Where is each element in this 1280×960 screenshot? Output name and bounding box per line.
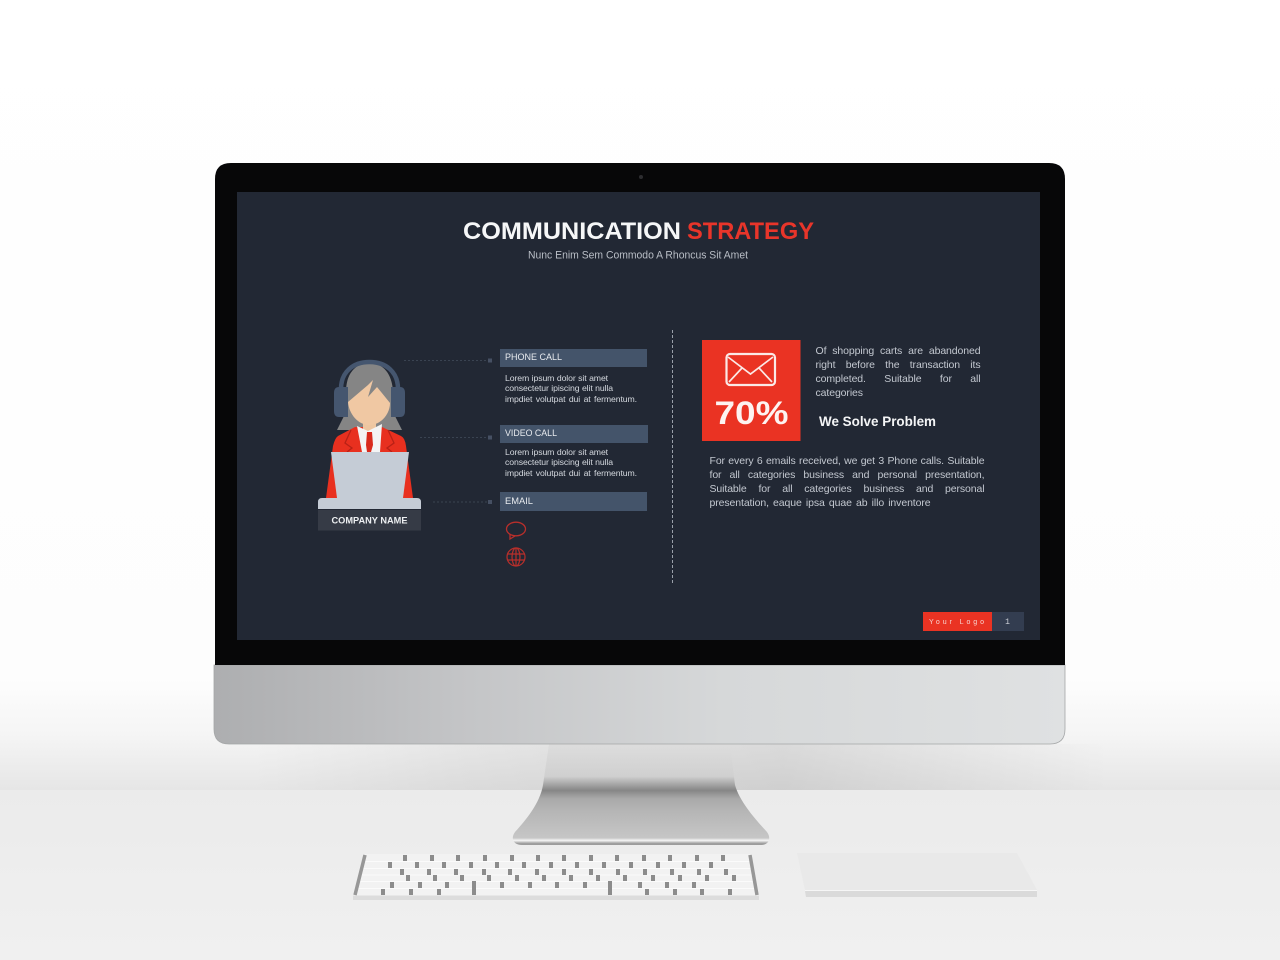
heading bar: email [500, 492, 647, 511]
text: emails and phone calls paragraph [710, 454, 984, 508]
ear cups [334, 387, 348, 417]
text: video call description: impdiet volutpat dui at fermentum. [505, 468, 637, 478]
stat card: 70 percent emails [702, 340, 800, 441]
footer: page number: 1 [1005, 618, 1010, 627]
subtitle: Nunc Enim Sem Commodo A Rhoncus Sit Amet [528, 250, 748, 262]
text: emails and phone calls paragraph: Suitable for all categories business and personal [710, 482, 984, 494]
text: phone call description: consectetur ipiscing elit nulla [505, 383, 613, 393]
keyboard [353, 854, 759, 900]
text: video call description [505, 446, 637, 478]
monitor chin [214, 665, 1065, 744]
divider [672, 330, 674, 584]
company label [318, 510, 421, 530]
illustration: call agent at laptop [318, 362, 421, 530]
monitor bezel [215, 163, 1065, 665]
title [463, 218, 814, 245]
text: video call description: consectetur ipiscing elit nulla [505, 457, 613, 467]
footer: logo tab [923, 612, 992, 631]
text: phone call description: impdiet volutpat dui at fermentum. [505, 394, 637, 404]
text: phone call description: Lorem ipsum dolor sit amet [505, 372, 608, 382]
panel: presentation slide on screen [237, 192, 1040, 640]
shirt and tie [357, 424, 382, 452]
lapels [345, 430, 394, 452]
monitor stand [513, 744, 769, 845]
text: phone call description [505, 372, 637, 404]
trackpad [797, 853, 1037, 897]
heading: we solve problem: We Solve Problem [819, 413, 936, 429]
text: shopping carts statistic: completed. Suitable for all [816, 372, 980, 384]
icon: globe [507, 548, 525, 566]
footer: logo tab: Your Logo [929, 619, 984, 626]
title: STRATEGY [687, 218, 814, 245]
title: COMMUNICATION [463, 218, 681, 245]
text: video call description: Lorem ipsum dolor sit amet [505, 446, 608, 456]
text: shopping carts statistic [816, 344, 980, 398]
text: emails and phone calls paragraph: presentation, eaque ipsa quae ab illo inventore [710, 496, 930, 508]
hair back [337, 363, 402, 430]
heading bar: phone call [500, 349, 647, 367]
neck and face [363, 418, 376, 431]
jacket [326, 427, 413, 498]
desk [318, 498, 421, 509]
icon: envelope [726, 354, 775, 385]
footer: page number [992, 612, 1024, 631]
text: shopping carts statistic: right before the transaction its [816, 358, 980, 370]
connector: email [433, 500, 492, 504]
text: emails and phone calls paragraph: For every 6 emails received, we get 3 Phone calls. Suitable [710, 454, 984, 466]
webcam [639, 175, 643, 179]
laptop [331, 452, 409, 498]
icon: speech bubble [506, 522, 526, 539]
text: shopping carts statistic: Of shopping carts are abandoned [816, 344, 980, 356]
text: shopping carts statistic: categories [816, 386, 863, 398]
heading bar: email: EMAIL [505, 496, 533, 507]
heading bar: video call: VIDEO CALL [505, 428, 557, 439]
text: emails and phone calls paragraph: for all categories business and personal presentation, [710, 468, 984, 480]
connector: phone call [404, 358, 492, 362]
headset band [341, 362, 398, 389]
stat card: 70 percent emails: 70% [714, 395, 789, 431]
illustration: call agent at laptop: COMPANY NAME [332, 516, 408, 526]
heading bar: video call [500, 425, 648, 443]
connector: video call [420, 436, 492, 440]
heading bar: phone call: PHONE CALL [505, 352, 562, 363]
